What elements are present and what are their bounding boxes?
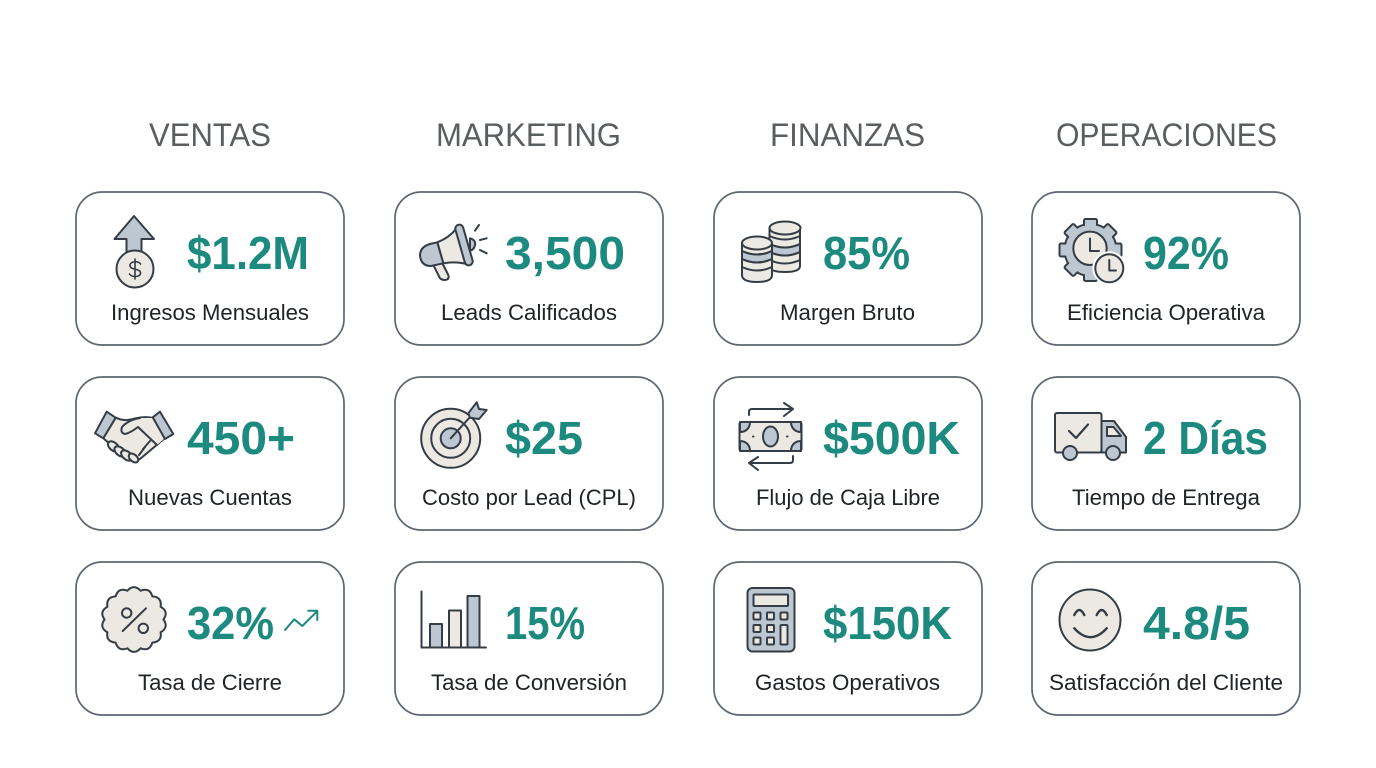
icon: target with dart [421, 402, 487, 468]
icon: bar chart [422, 592, 486, 648]
panel: costo por lead [395, 377, 663, 530]
heading: marketing: MARKETING [436, 117, 621, 153]
panel: satisfaccion del cliente [1032, 562, 1300, 715]
icon: percent badge [102, 587, 166, 652]
icon: megaphone [420, 224, 487, 280]
value: 92% [1143, 227, 1229, 279]
panel: flujo de caja libre [714, 377, 982, 530]
value: $150K [823, 597, 952, 649]
heading: operaciones: OPERACIONES [1056, 117, 1277, 153]
panel: tasa de conversion [395, 562, 663, 715]
icon: smiley face [1060, 590, 1120, 650]
value: 32% [187, 597, 274, 649]
label: Nuevas Cuentas [128, 485, 292, 510]
heading: ventas: VENTAS [149, 117, 271, 153]
label: Costo por Lead (CPL) [422, 485, 636, 510]
label: Tiempo de Entrega [1072, 485, 1261, 510]
label: Ingresos Mensuales [111, 300, 309, 325]
label: Flujo de Caja Libre [756, 485, 940, 510]
panel: gastos operativos [714, 562, 982, 715]
value: 4.8/5 [1143, 597, 1250, 649]
label: Leads Calificados [441, 300, 617, 325]
value: 3,500 [505, 227, 625, 279]
label: Tasa de Conversión [431, 670, 627, 695]
panel: margen bruto [714, 192, 982, 345]
value: $25 [505, 412, 583, 464]
value: 15% [505, 597, 585, 649]
panel: tiempo de entrega [1032, 377, 1300, 530]
label: Eficiencia Operativa [1067, 300, 1266, 325]
label: Satisfacción del Cliente [1049, 670, 1283, 695]
icon: arrow and dollar coin [114, 216, 154, 288]
panel: nuevas cuentas [76, 377, 344, 530]
panel: tasa de cierre [76, 562, 344, 715]
label: Gastos Operativos [755, 670, 940, 695]
panel: leads calificados [395, 192, 663, 345]
icon: trend arrow [285, 611, 317, 630]
icon: calculator [748, 588, 794, 652]
icon: delivery truck [1055, 413, 1126, 460]
icon: banknote with arrows [740, 403, 802, 470]
panel: ingresos mensuales [76, 192, 344, 345]
label: Tasa de Cierre [138, 670, 282, 695]
value: 85% [823, 227, 910, 279]
label: Margen Bruto [780, 300, 915, 325]
icon: gear with clocks [1060, 219, 1126, 285]
value: 450+ [187, 412, 295, 464]
icon: coin stacks [742, 222, 800, 282]
icon: handshake [95, 412, 173, 464]
value: $500K [823, 412, 960, 464]
panel: eficiencia operativa [1032, 192, 1300, 345]
value: $1.2M [187, 227, 309, 279]
value: 2 Días [1143, 412, 1268, 464]
heading: finanzas: FINANZAS [770, 117, 925, 153]
